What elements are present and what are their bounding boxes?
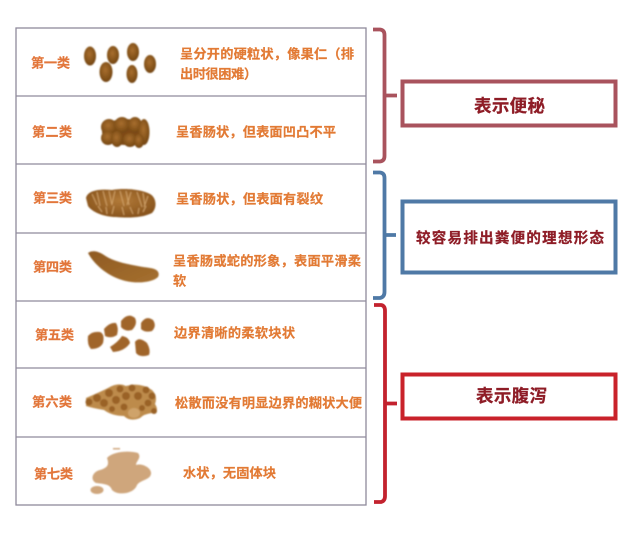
row 1: type 1 <box>31 43 354 83</box>
callout: ideal form <box>402 202 616 272</box>
callout text: diarrhea: 表示腹泻 <box>476 386 547 406</box>
callout text: constipation: 表示便秘 <box>474 96 546 116</box>
icon: lumpy sausage <box>101 117 150 148</box>
table: stool types <box>16 28 366 505</box>
row 3 label: 第三类 <box>33 190 72 206</box>
icon: mushy fragments <box>86 384 157 420</box>
row 5 label: 第五类 <box>35 326 74 342</box>
callout: diarrhea <box>402 374 616 418</box>
row 4 description: 软 <box>173 272 186 288</box>
row 3: type 3 <box>33 189 323 218</box>
row 1 description <box>180 46 354 82</box>
row 6 label: 第六类 <box>32 394 72 410</box>
row 6: type 6 <box>32 384 362 420</box>
bracket: ideal <box>373 172 396 298</box>
icon: smooth snake <box>88 251 159 282</box>
row 7 label: 第七类 <box>34 466 73 482</box>
row 4 description <box>173 252 361 288</box>
bracket: diarrhea <box>374 305 397 502</box>
row 1 description: 呈分开的硬粒状，像果仁（排 <box>180 46 354 62</box>
row 3 description: 呈香肠状，但表面有裂纹 <box>176 190 323 206</box>
row 7 description: 水状，无固体块 <box>183 464 276 480</box>
row 6 description: 松散而没有明显边界的糊状大便 <box>175 394 362 410</box>
row 1 description: 出时很困难） <box>180 66 257 82</box>
row 5 description: 边界清晰的柔软块状 <box>174 324 295 340</box>
icon: soft blobs <box>88 316 155 356</box>
row 4 description: 呈香肠或蛇的形象，表面平滑柔 <box>173 252 361 268</box>
fragment highlight <box>128 408 140 418</box>
row 5: type 5 <box>35 316 295 356</box>
row 2: type 2 <box>32 117 336 148</box>
row 7: type 7 <box>34 448 276 494</box>
row 4 label: 第四类 <box>33 258 72 274</box>
icon: separate hard lumps <box>84 43 156 83</box>
callout: constipation <box>402 82 616 126</box>
row 1 label: 第一类 <box>31 54 70 70</box>
row 4: type 4 <box>33 251 361 288</box>
icon: watery puddle <box>90 448 151 494</box>
callout text: ideal form: 较容易排出粪便的理想形态 <box>416 229 604 247</box>
icon: cracked sausage <box>86 189 156 218</box>
row 2 label: 第二类 <box>32 124 72 140</box>
row 2 description: 呈香肠状，但表面凹凸不平 <box>176 124 336 140</box>
bracket: constipation <box>373 30 397 162</box>
